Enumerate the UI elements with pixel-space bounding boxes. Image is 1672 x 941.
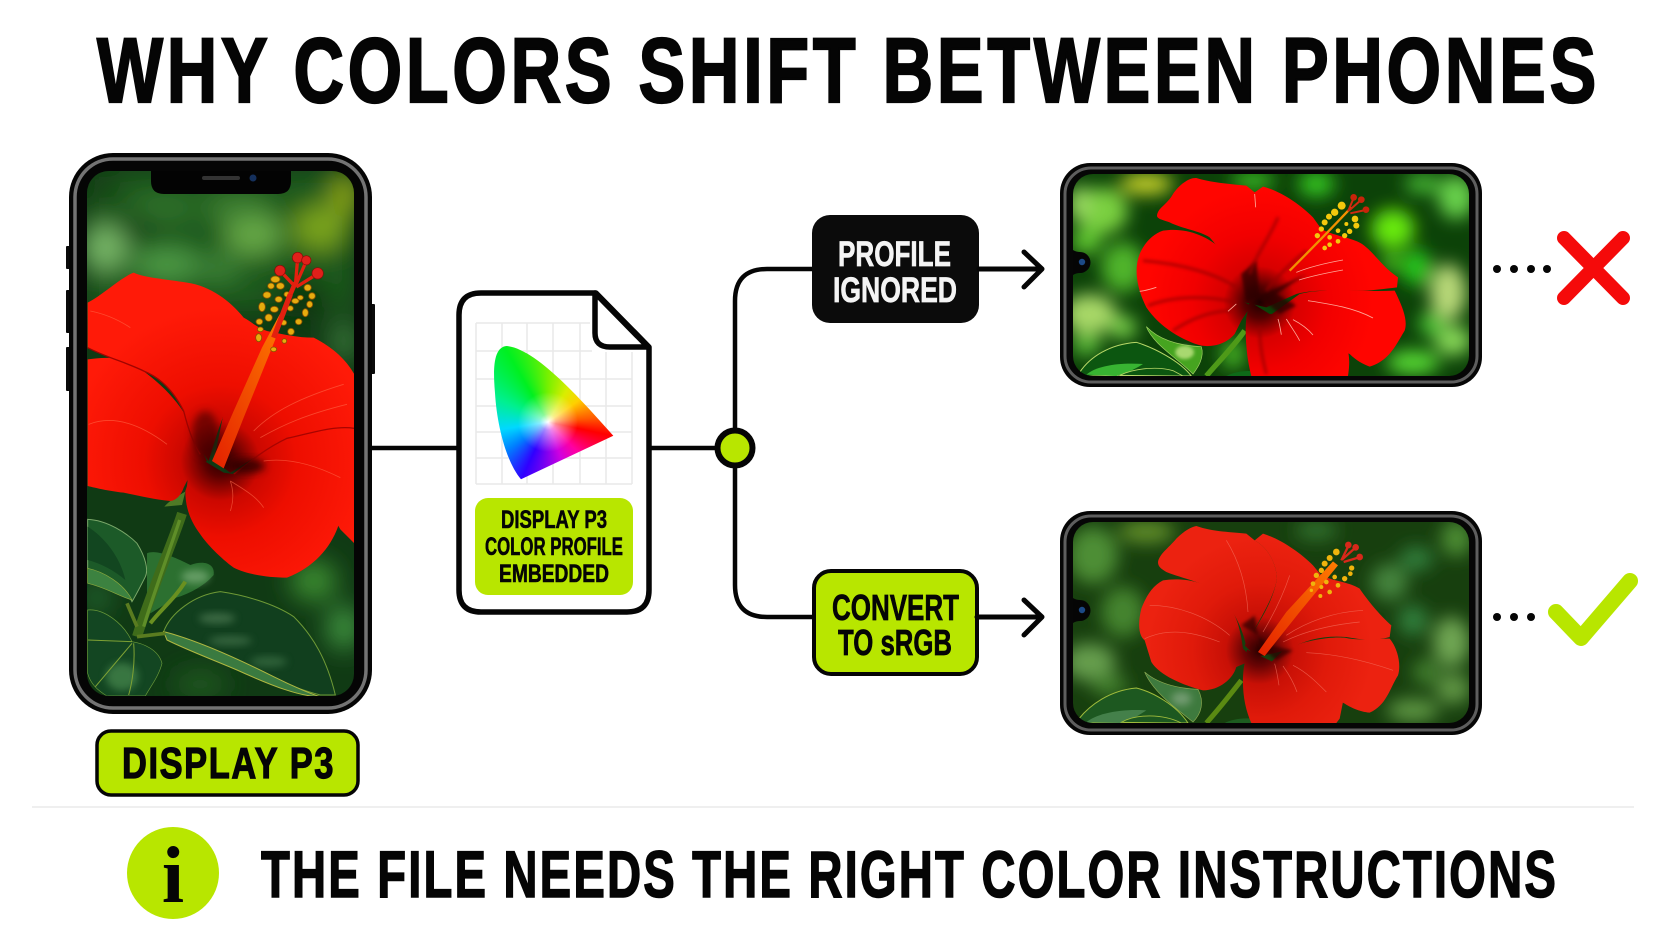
profile label: DISPLAY P3	[501, 506, 607, 534]
label: Display P3	[97, 731, 358, 795]
petal veins	[1145, 540, 1393, 692]
punch-hole camera	[1073, 250, 1090, 275]
leaves and stem	[1145, 672, 1202, 722]
icon: info circle: i	[162, 832, 184, 920]
anthers	[256, 276, 315, 352]
profile label	[475, 498, 633, 595]
box: convert to sRGB	[814, 571, 977, 674]
dotted line to check	[1493, 613, 1535, 621]
phone body	[69, 153, 372, 714]
center throat	[192, 411, 219, 458]
panel: source phone Display P3	[66, 153, 375, 714]
leaves and stem	[1146, 327, 1202, 374]
page fold	[595, 293, 648, 347]
icon: red cross	[1564, 238, 1623, 298]
stamen	[1258, 561, 1338, 656]
chromaticity grid	[476, 323, 632, 484]
box: convert to sRGB: CONVERT	[832, 587, 959, 628]
petals	[1245, 534, 1391, 657]
box: convert to sRGB: TO sRGB	[838, 622, 952, 663]
arrow: to ignored result	[979, 252, 1042, 287]
box: profile ignored: IGNORED	[833, 271, 957, 310]
color gamut diagram	[494, 346, 614, 480]
panel: file with embedded color profile	[459, 293, 649, 612]
side buttons	[66, 246, 375, 391]
punch-hole camera	[1073, 598, 1090, 623]
stamen	[1290, 207, 1351, 271]
petal veins	[1140, 194, 1373, 341]
arrow: to converted result	[977, 600, 1042, 635]
icon: info circle	[127, 827, 219, 920]
connector lines between phone, file and branches	[372, 269, 812, 617]
box: profile ignored: PROFILE	[838, 235, 951, 274]
profile label: COLOR PROFILE	[485, 533, 623, 561]
center throat	[1241, 261, 1306, 314]
oversaturated flower photo	[1063, 171, 1475, 376]
dotted line to cross	[1493, 265, 1551, 273]
icon: lime check mark	[1556, 581, 1630, 638]
petal veins	[89, 311, 347, 511]
profile label: EMBEDDED	[499, 560, 609, 588]
branch node	[718, 430, 752, 466]
panel: converted phone result	[1060, 511, 1482, 735]
document outline	[459, 293, 649, 612]
natural flower photo	[1064, 521, 1472, 723]
anthers	[1315, 202, 1359, 250]
dark petal folds	[1143, 217, 1306, 374]
box: profile ignored	[812, 215, 979, 323]
stamen	[212, 314, 285, 468]
leaves and stem	[88, 492, 335, 697]
petals	[214, 318, 354, 473]
center throat	[1241, 615, 1293, 660]
panel: oversaturated phone result	[1060, 163, 1482, 387]
label: Display P3: DISPLAY P3	[122, 739, 335, 788]
flower photo on phone screen	[80, 171, 362, 698]
anthers	[1310, 549, 1354, 598]
notch with speaker and camera	[151, 171, 291, 194]
petals	[1157, 178, 1398, 307]
